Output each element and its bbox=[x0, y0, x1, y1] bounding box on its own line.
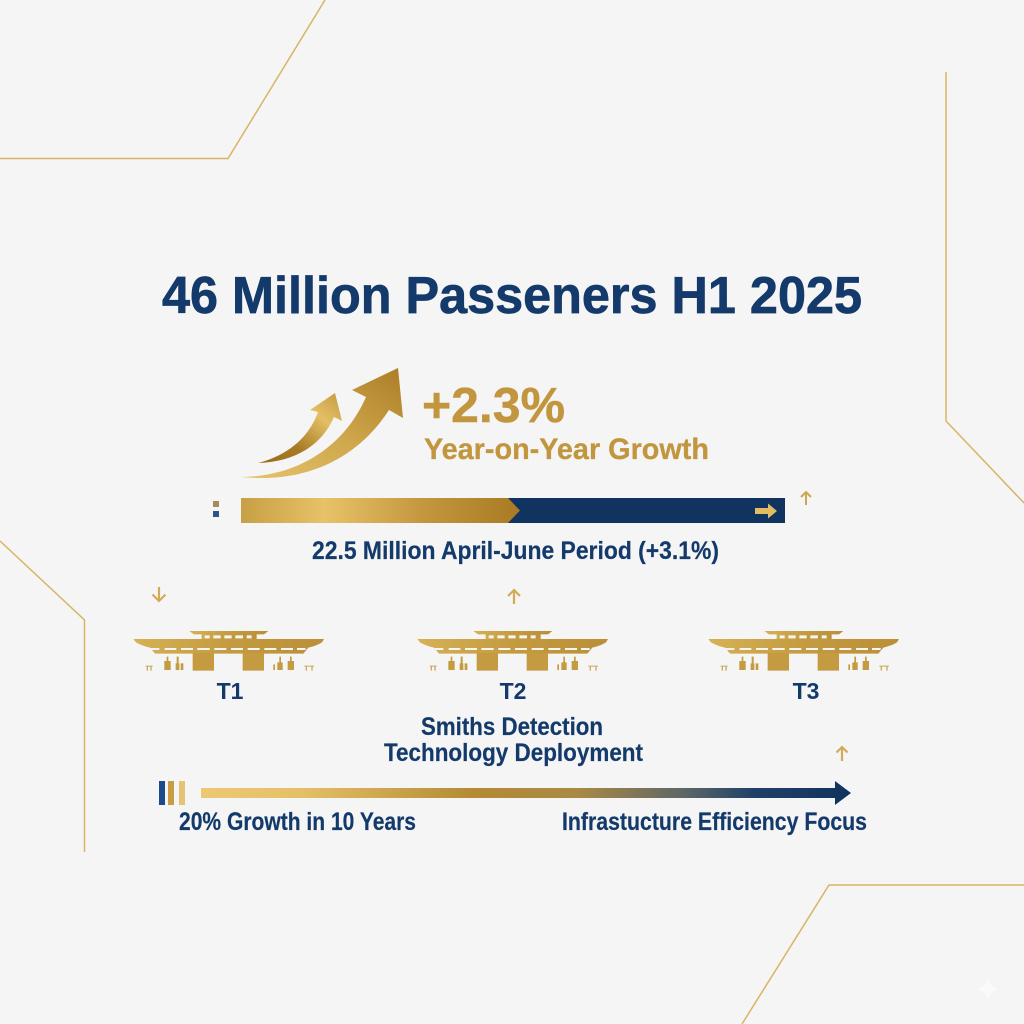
bar navy segment bbox=[241, 498, 785, 523]
icon: small growth arrow bbox=[258, 393, 342, 463]
icon: T3 terminal bbox=[708, 631, 899, 671]
growth figure: +2.3% bbox=[422, 379, 565, 433]
timeline arrow bbox=[201, 781, 851, 805]
T3 label: T3 bbox=[793, 678, 819, 704]
technology caption: Technology Deployment bbox=[384, 739, 644, 767]
bar legend squares bbox=[213, 501, 219, 517]
T1 label: T1 bbox=[217, 678, 244, 704]
icon: up arrow above timeline bbox=[836, 747, 848, 761]
timeline right label: Infrastucture Efficiency Focus bbox=[562, 808, 867, 836]
bar gold segment bbox=[241, 498, 520, 523]
icon: large growth arrow bbox=[242, 368, 403, 478]
technology caption: Smiths Detection bbox=[421, 713, 603, 741]
icon: three vertical bars bbox=[159, 781, 185, 805]
icon: up arrow above T2 bbox=[508, 590, 520, 604]
icon: corner sparkle bbox=[977, 978, 999, 1000]
icon: up arrow by bar bbox=[801, 492, 811, 505]
icon: double growth arrows bbox=[242, 368, 403, 478]
T2 label: T2 bbox=[500, 678, 526, 704]
timeline left label: 20% Growth in 10 Years bbox=[179, 808, 416, 836]
technology caption bbox=[384, 713, 644, 767]
icon: T2 terminal bbox=[417, 631, 608, 671]
title: 46 Million Passeners H1 2025 bbox=[162, 267, 862, 325]
bar caption: 22.5 Million April-June Period (+3.1%) bbox=[312, 537, 719, 565]
progress bar bbox=[213, 498, 785, 523]
icon: arrow inside bar bbox=[755, 504, 777, 518]
icon: down arrow above T1 bbox=[152, 587, 166, 601]
icon: T1 terminal bbox=[133, 631, 324, 671]
growth caption: Year-on-Year Growth bbox=[424, 433, 709, 466]
